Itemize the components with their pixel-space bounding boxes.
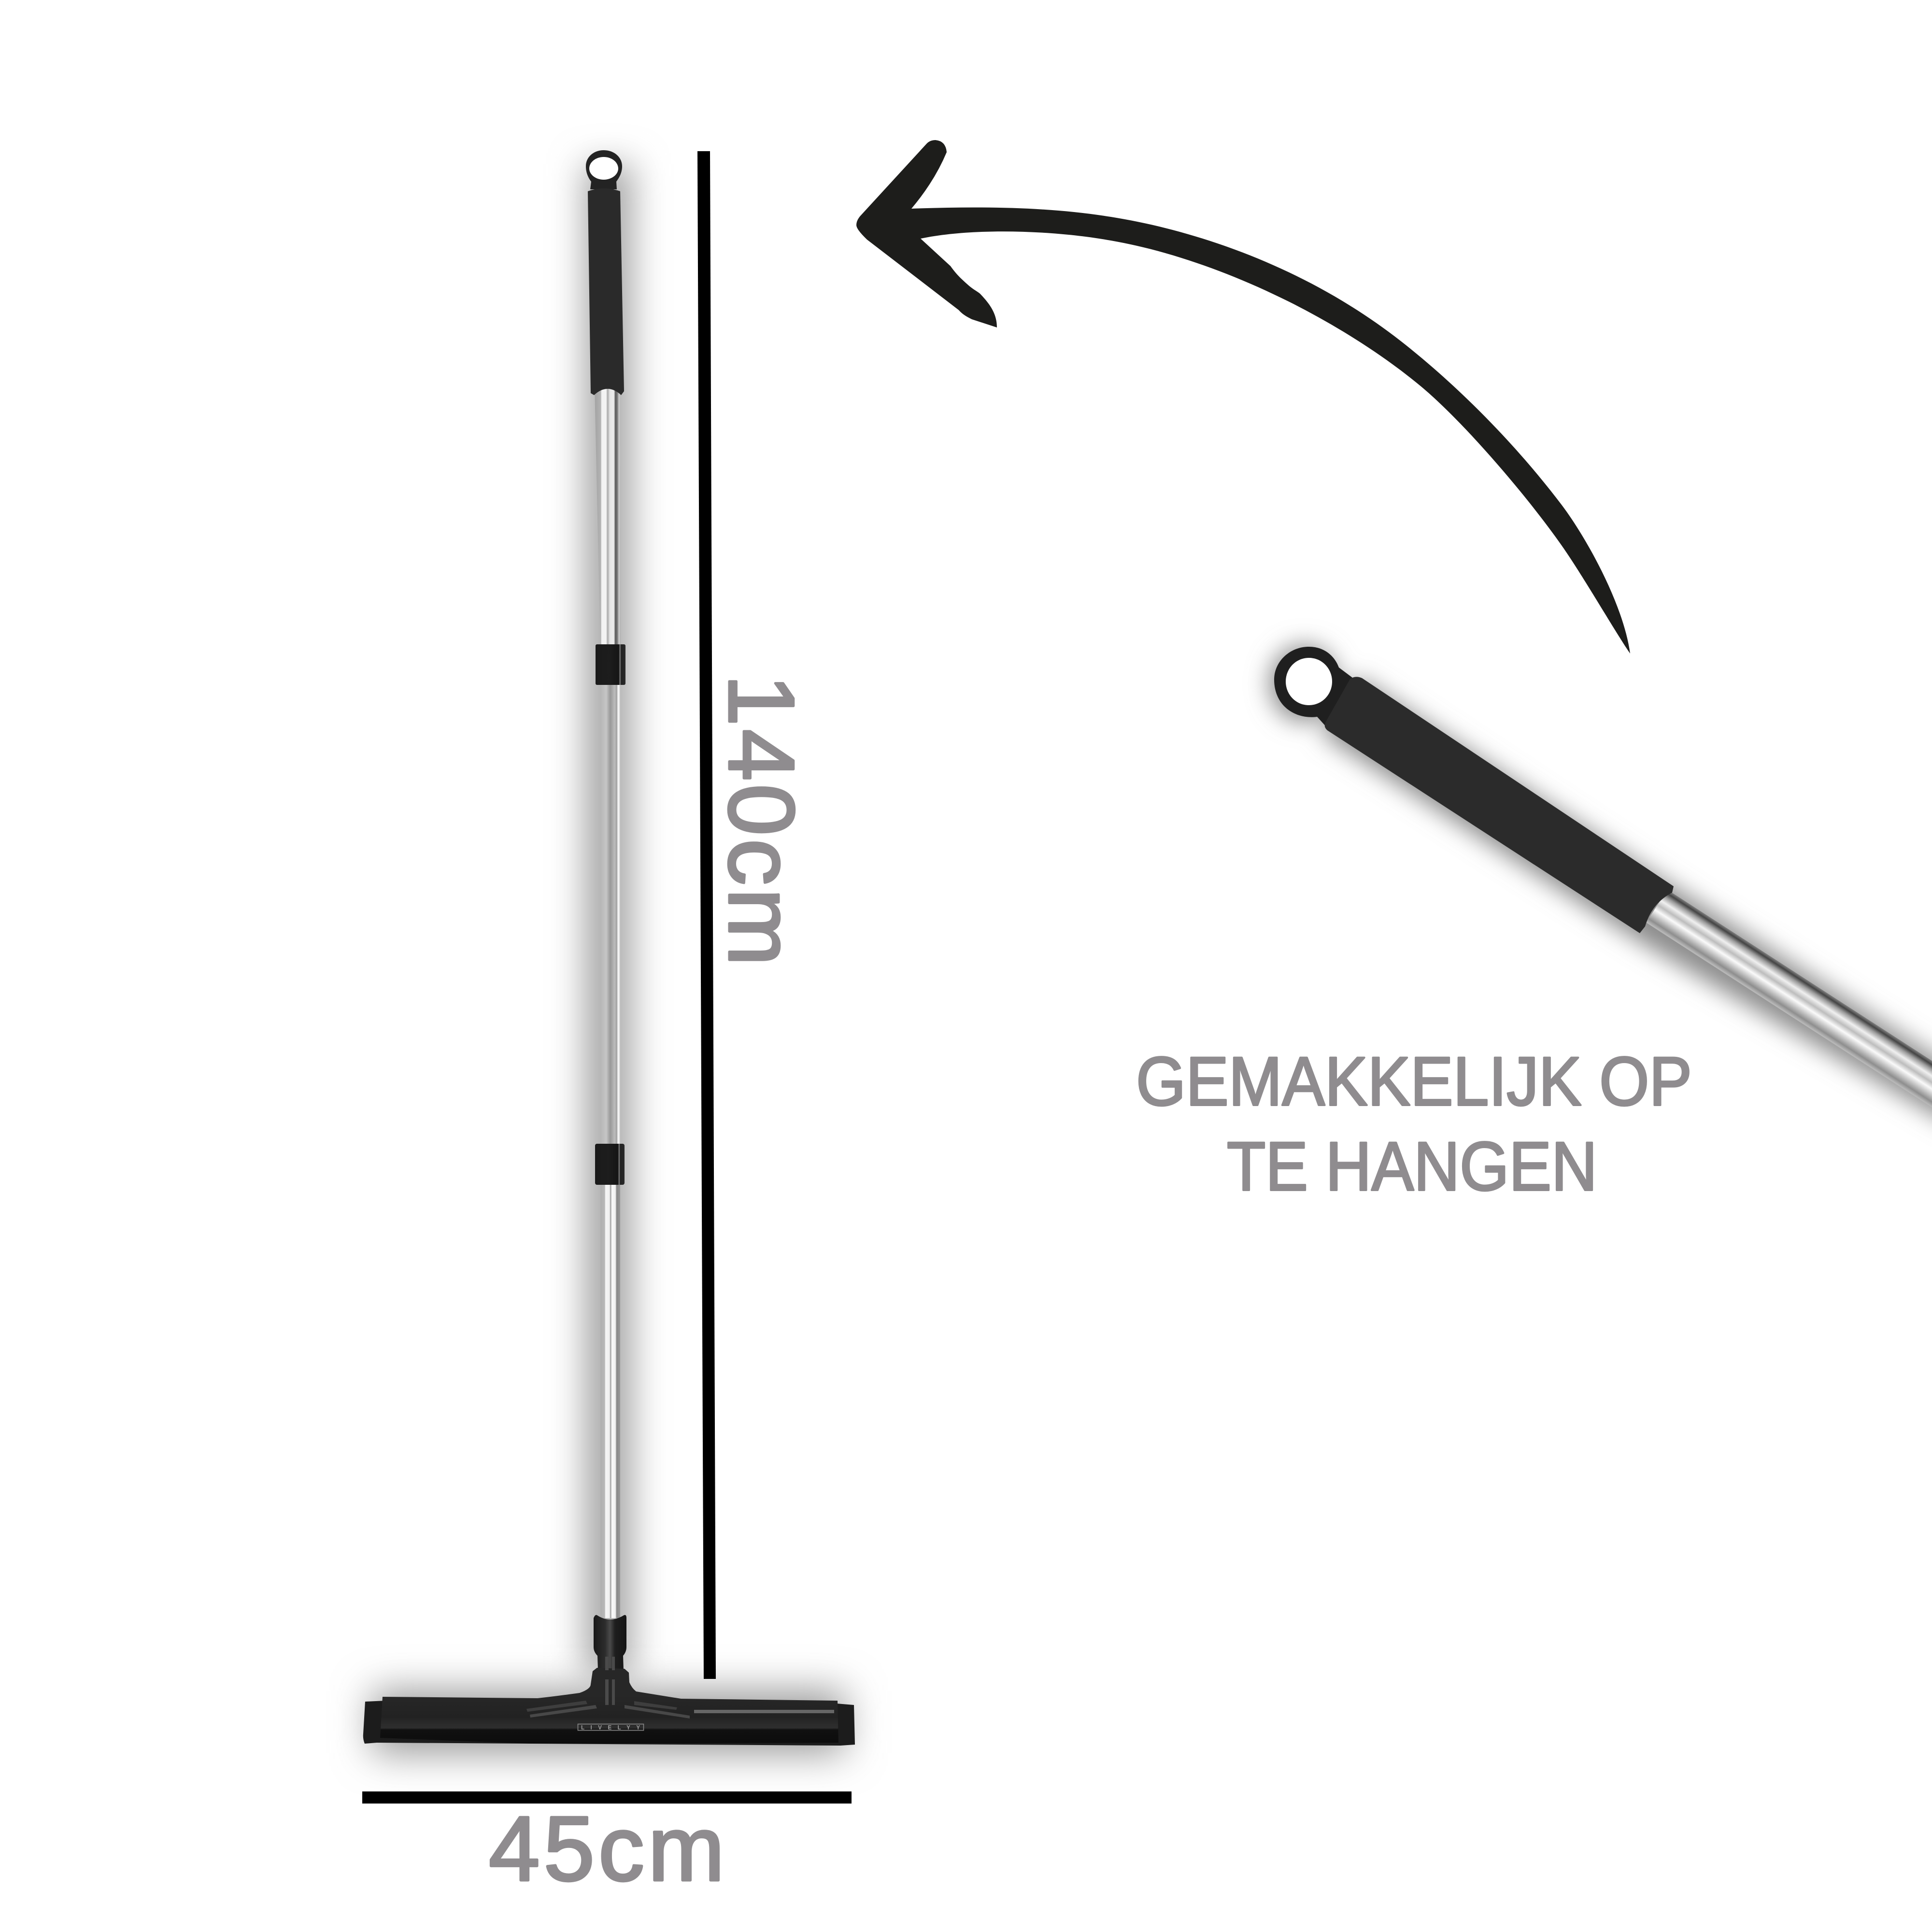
width label: 45cm <box>489 1798 724 1900</box>
close-up hanging ring <box>1274 647 1352 727</box>
width dimension line <box>362 1791 852 1804</box>
caption line two: TE HANGEN <box>1227 1128 1597 1205</box>
close-up steel tube <box>1646 890 1932 1110</box>
LIVELYY logo on head: LIVELYY <box>581 1725 640 1731</box>
close-up foam grip <box>1325 677 1674 933</box>
head highlights <box>526 1657 834 1719</box>
foam handle grip <box>588 188 624 395</box>
rubber blade <box>363 1701 855 1746</box>
squeegee head body <box>380 1668 838 1744</box>
close-up shadow <box>1269 645 1932 1128</box>
head connector neck <box>594 1615 626 1670</box>
height dimension line <box>697 151 716 1679</box>
telescopic collar bottom <box>595 1144 625 1185</box>
full mop product photo <box>363 150 855 1753</box>
caption <box>1136 1043 1692 1205</box>
telescopic collar top <box>596 644 625 685</box>
height label: 140cm <box>710 674 814 966</box>
middle steel tube <box>600 647 620 1150</box>
upper steel tube <box>595 386 621 647</box>
curved arrow pointing to the hanging ring <box>856 140 1630 653</box>
handle close-up photo <box>1269 645 1932 1128</box>
caption line one: GEMAKKELIJK OP <box>1136 1043 1692 1120</box>
shadow behind mop <box>372 164 845 1753</box>
lower steel tube <box>600 1179 620 1618</box>
hanging ring at top of handle <box>586 150 622 189</box>
